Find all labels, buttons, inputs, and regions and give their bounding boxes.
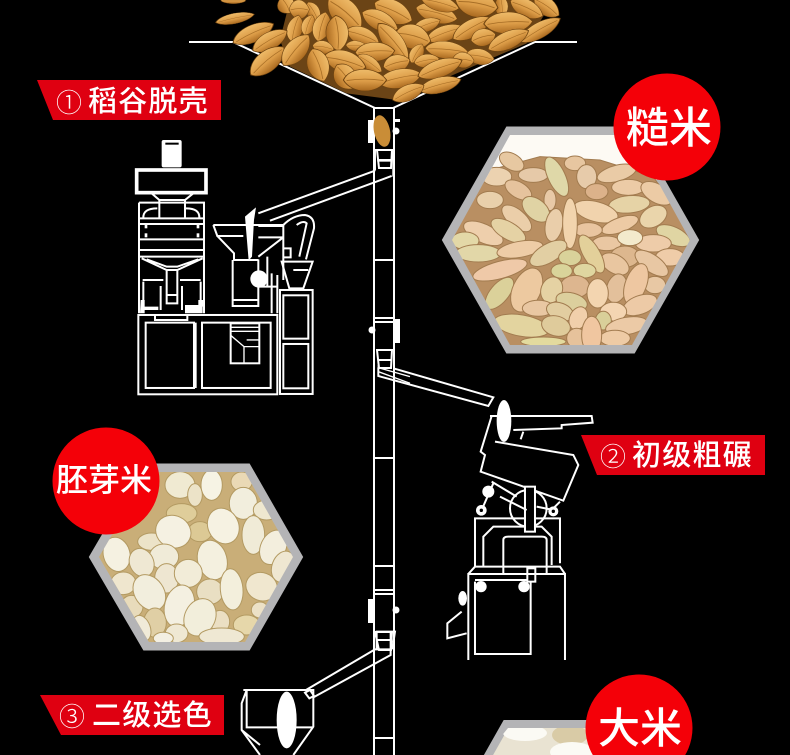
step label 2: 初级粗碾	[581, 435, 765, 475]
step label 1: 稻谷脱壳	[37, 80, 221, 120]
red badge: 大米: 大米	[598, 705, 682, 752]
red badge: 糙米	[614, 74, 720, 180]
step label 2: 初级粗碾: 初级粗碾	[632, 439, 753, 472]
step label 2: 初级粗碾: ②	[600, 442, 626, 472]
machine 1: husker	[137, 140, 410, 394]
step label 3: 二级选色: ③	[59, 702, 85, 732]
red badge: 胚芽米	[52, 428, 160, 534]
step label 1: 稻谷脱壳: 稻谷脱壳	[88, 85, 209, 118]
hexagon photo: polished rice	[484, 720, 593, 755]
red badge: 大米	[586, 674, 692, 755]
step label 1: 稻谷脱壳: ①	[56, 88, 82, 118]
step label 3: 二级选色: 二级选色	[92, 699, 213, 732]
hopper funnel	[189, 42, 577, 108]
vertical elevator pipe	[368, 108, 400, 755]
hexagon photo: brown rice	[447, 131, 694, 354]
machine 2: rough milling	[378, 367, 593, 660]
paddy grains pile	[215, 0, 564, 107]
red badge: 胚芽米: 胚芽米	[56, 462, 152, 498]
machine 3: colour sorter	[242, 632, 395, 755]
hexagon photo: germ rice	[80, 460, 307, 647]
red badge: 糙米: 糙米	[626, 105, 712, 153]
step label 3: 二级选色	[40, 695, 224, 735]
grain inside pipe	[371, 114, 393, 148]
